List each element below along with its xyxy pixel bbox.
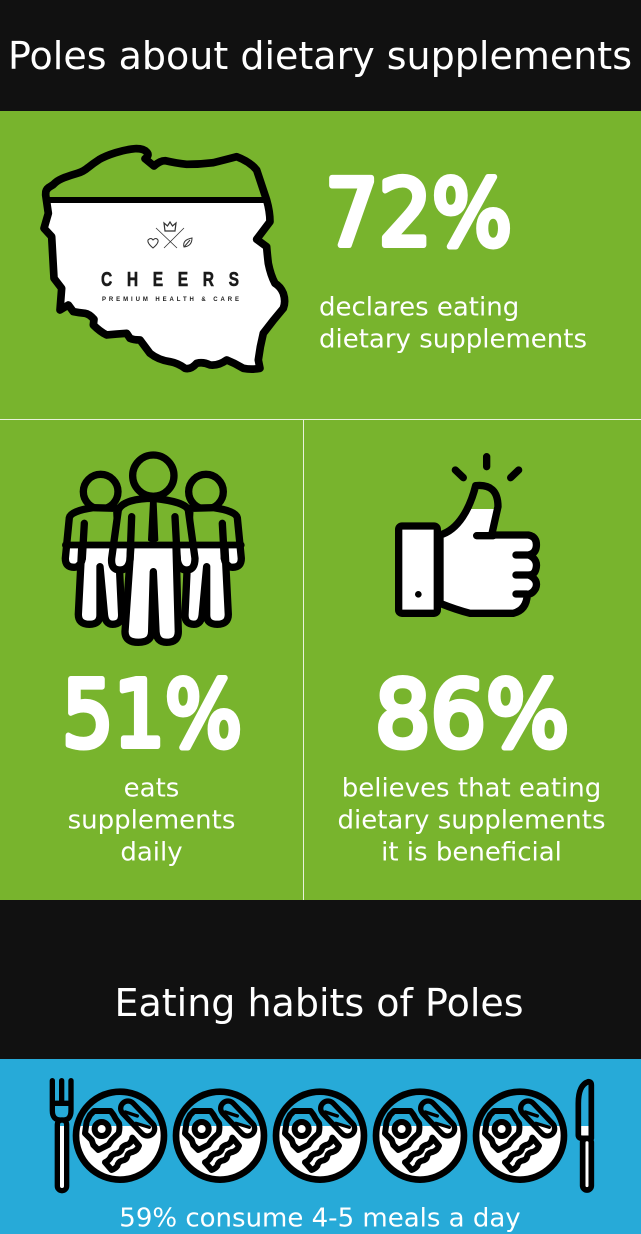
meal icons (76, 1092, 564, 1180)
icon: knife (578, 1082, 591, 1190)
icon: plate 3 (276, 1092, 364, 1180)
stat: 51%: 51% (62, 661, 242, 768)
text: eats supplements daily: supplements (68, 806, 235, 836)
heading: eating habits: Eating habits of Poles (114, 981, 524, 1025)
logo tagline: PREMIUM HEALTH & CARE (102, 297, 239, 303)
text: declares eating dietary supplements: dietary supplements (319, 324, 587, 354)
text: believes that eating dietary supplements it is beneficial: dietary supplements (338, 806, 606, 836)
stat: 86%: 86% (375, 661, 569, 768)
text: declares eating dietary supplements: declares eating (319, 292, 519, 322)
icon: map of Poland with logo (44, 149, 285, 369)
icon: fork (52, 1081, 71, 1191)
icon: plate 2 (176, 1092, 264, 1180)
panel: meals (0, 1059, 641, 1234)
logo wordmark: CHEERS (101, 268, 239, 290)
text: believes that eating dietary supplements it is beneficial: believes that eating (342, 774, 601, 804)
text: believes that eating dietary supplements it is beneficial: it is beneficial (381, 838, 562, 868)
icon: plate 1 (76, 1092, 164, 1180)
panel: green statistics (0, 111, 641, 900)
text: 59% consume 4-5 meals a day: 59% consume 4-5 meals a day (119, 1204, 521, 1234)
text: eats supplements daily: daily (120, 838, 183, 868)
text: eats supplements daily: eats (124, 774, 179, 804)
icon: plate 4 (376, 1092, 464, 1180)
header band (0, 0, 641, 111)
stat: 72%: 72% (325, 160, 512, 267)
title: Poles about dietary supplements (8, 34, 632, 78)
icon: thumbs up (399, 457, 536, 613)
icon: plate 5 (476, 1092, 564, 1180)
icon: three people (65, 455, 241, 642)
logo emblem (148, 222, 192, 248)
